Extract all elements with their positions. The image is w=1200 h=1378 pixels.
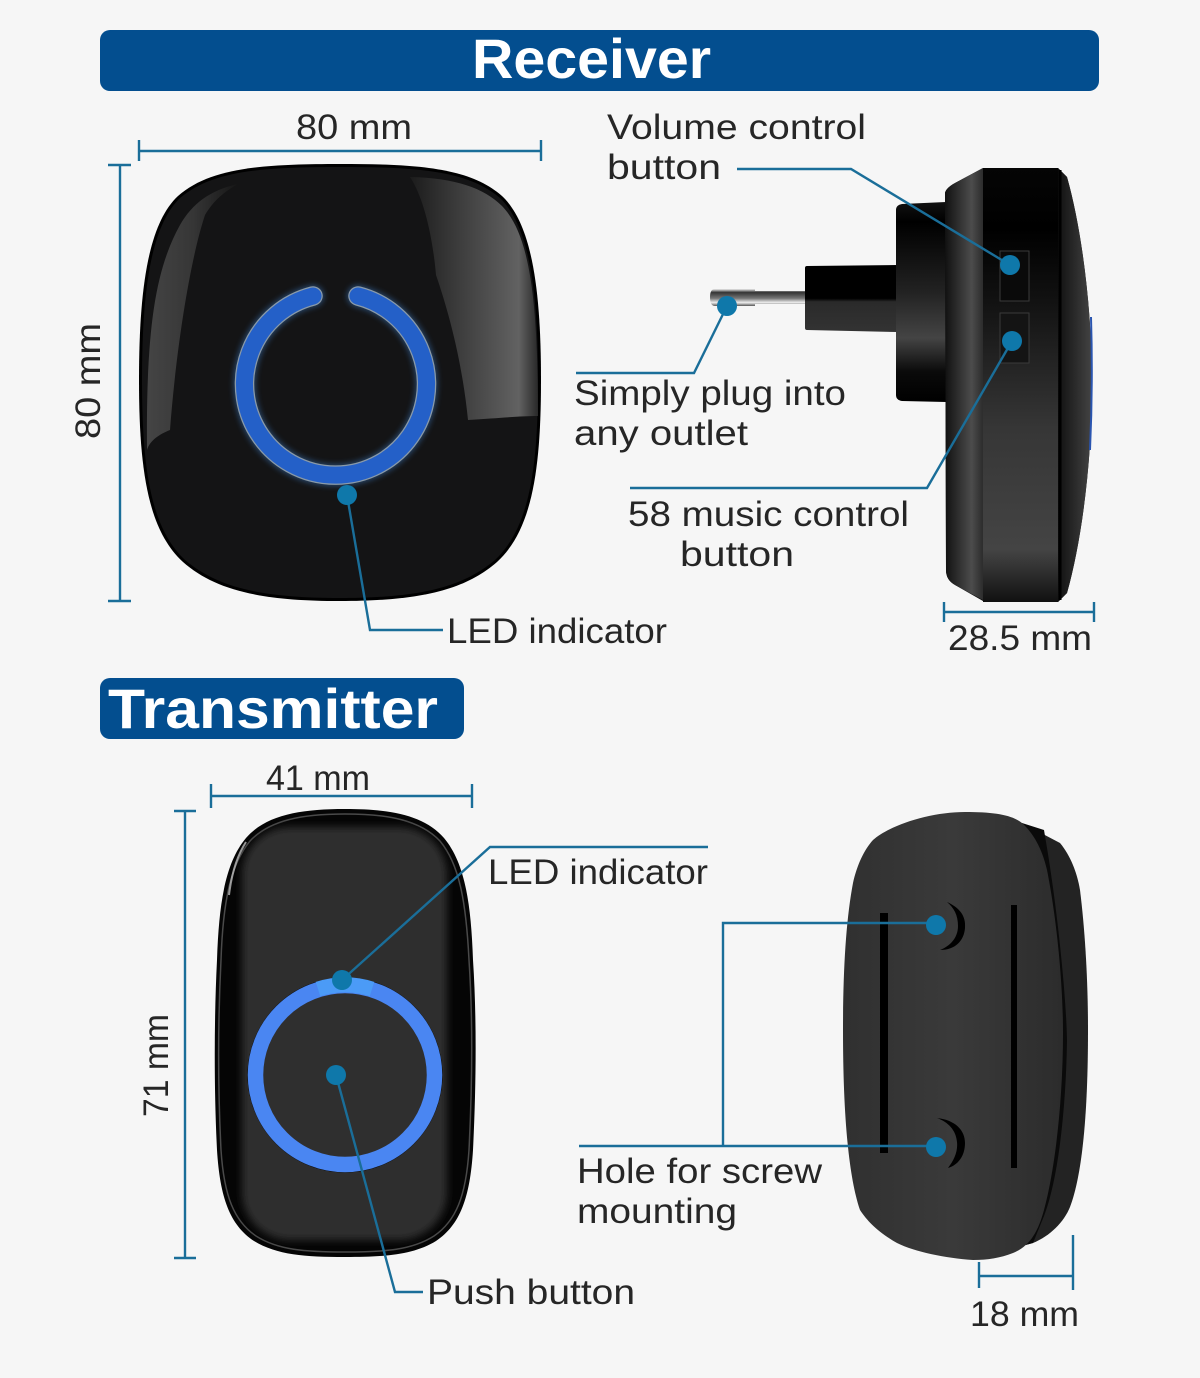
callout: plug: any outlet <box>574 414 748 453</box>
plug pin <box>710 289 805 306</box>
callout: 58 music control button <box>628 331 1022 574</box>
receiver front view <box>139 164 541 601</box>
push button ring <box>248 978 442 1172</box>
callout: receiver LED indicator <box>337 485 667 651</box>
dimension: receiver height 80 mm: 80 mm <box>69 323 108 439</box>
callout: push button <box>326 1065 635 1312</box>
receiver side view <box>710 168 1092 602</box>
plug body <box>805 265 897 332</box>
dimension: transmitter width 41 mm: 41 mm <box>266 759 370 798</box>
banner: Transmitter heading: Transmitter <box>108 677 438 740</box>
banner: Receiver heading: Receiver <box>472 27 711 90</box>
callout: hole for screw mounting <box>577 915 946 1231</box>
dimension: transmitter depth 18 mm <box>970 1235 1079 1334</box>
callout: hole for screw mounting: Hole for screw <box>577 1152 823 1191</box>
callout: volume control button: Volume control <box>607 108 866 147</box>
callout: transmitter LED indicator: LED indicator <box>488 853 708 892</box>
callout: plug: Simply plug into <box>574 374 846 413</box>
callout: push button: Push button <box>427 1273 635 1312</box>
dimension: transmitter width 41 mm <box>211 759 472 808</box>
dimension: receiver height 80 mm <box>69 165 131 601</box>
dimension: receiver width 80 mm <box>139 108 541 161</box>
dimension: receiver width 80 mm: 80 mm <box>296 108 412 147</box>
screw hole crescents <box>937 902 965 1168</box>
dimension: receiver depth 28.5 mm <box>944 602 1094 658</box>
callout: receiver LED indicator: LED indicator <box>447 612 667 651</box>
LED ring <box>245 296 426 475</box>
callout: transmitter LED indicator <box>332 847 708 990</box>
transmitter front view <box>215 809 476 1257</box>
mounting slots <box>880 905 1017 1168</box>
dimension: transmitter depth 18 mm: 18 mm <box>970 1295 1079 1334</box>
callout: 58 music control button: 58 music control <box>628 495 909 534</box>
dimension: transmitter height 71 mm <box>137 811 196 1258</box>
banner: Receiver heading <box>100 27 1099 91</box>
callout: 58 music control button: button <box>680 535 794 574</box>
dimension: receiver depth 28.5 mm: 28.5 mm <box>948 619 1092 658</box>
callout: volume control button <box>607 108 1020 275</box>
main housing <box>945 168 1092 602</box>
callout: volume control button: button <box>607 148 721 187</box>
plug base <box>896 202 946 402</box>
transmitter back view <box>843 812 1088 1260</box>
callout: hole for screw mounting: mounting <box>577 1192 737 1231</box>
dimension: transmitter height 71 mm: 71 mm <box>137 1014 176 1117</box>
callout: plug <box>574 296 846 453</box>
